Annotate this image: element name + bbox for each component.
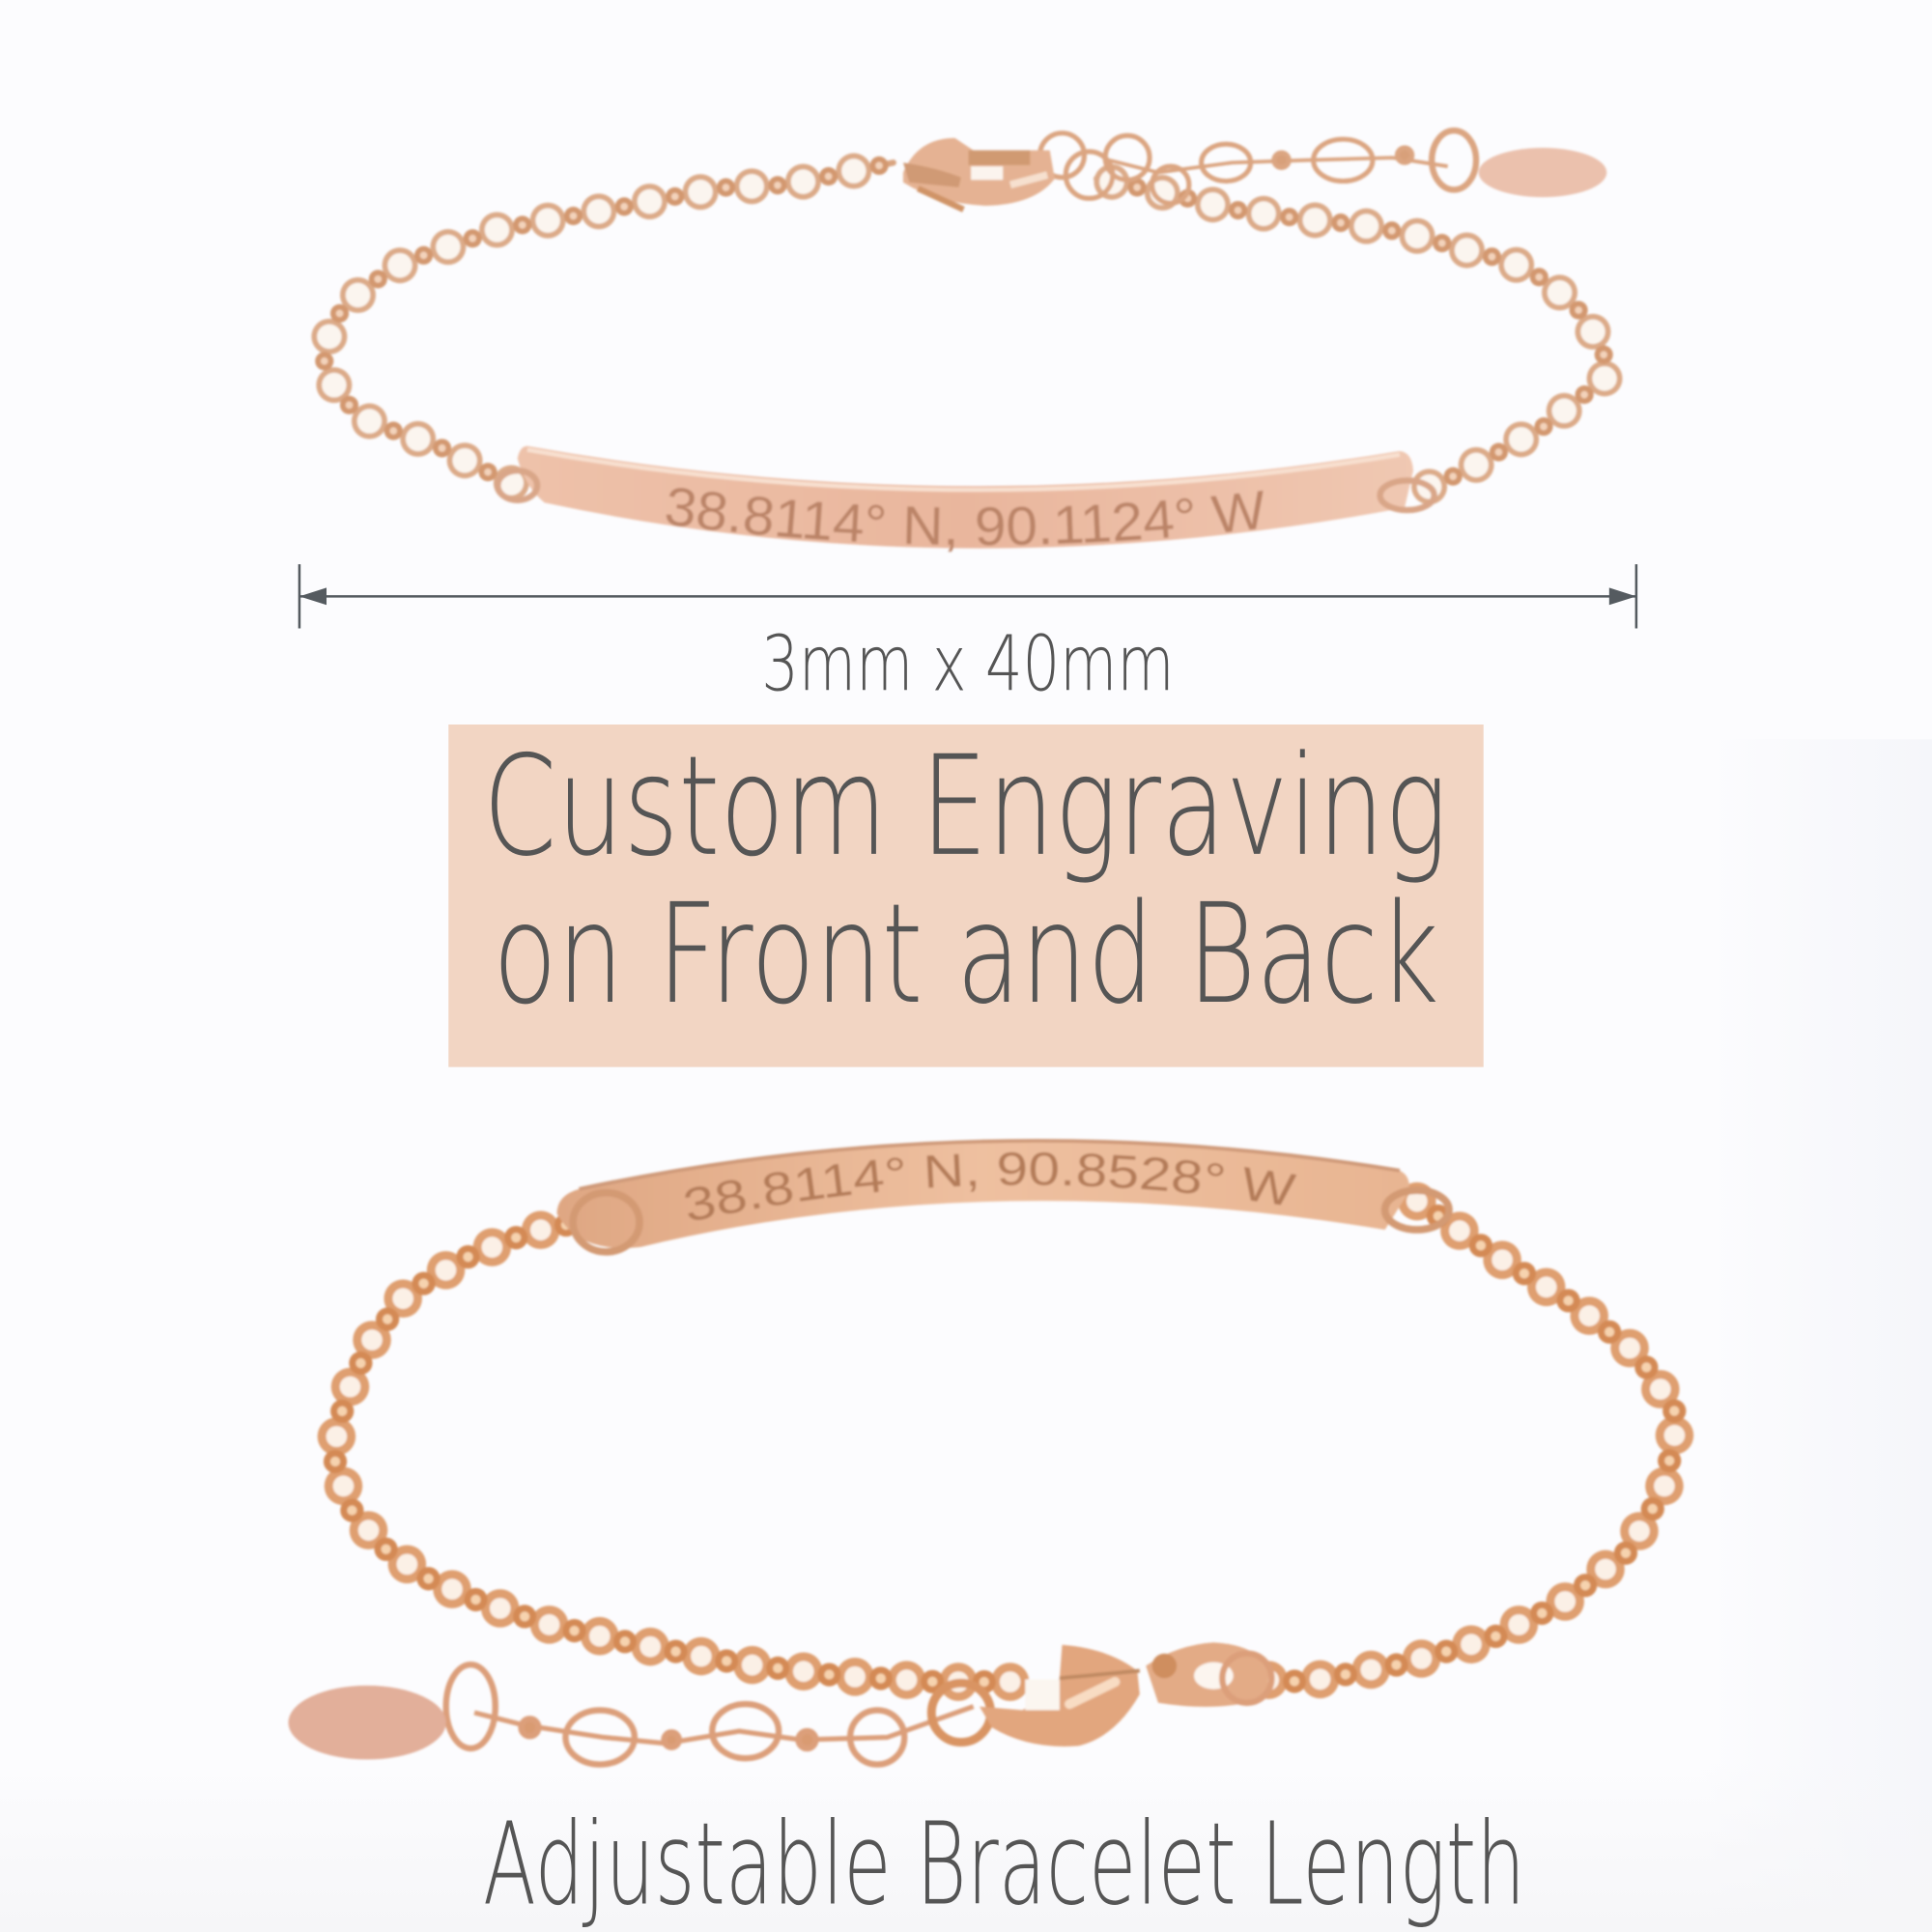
- bottom tag charm: [288, 1686, 446, 1759]
- top extender chain: [1040, 130, 1476, 203]
- top engraved bar: [497, 444, 1439, 554]
- top bar engraving: 38.8114° N, 90.1124° W: [666, 487, 1264, 554]
- bottom connector rings: [1146, 1642, 1271, 1707]
- dimension label: 3mm x 40mm: [761, 619, 1175, 708]
- bottom bracelet chain: [332, 1202, 1678, 1682]
- bottom engraved bar: [555, 1138, 1455, 1258]
- top lobster clasp: [903, 138, 1055, 210]
- top tag charm: [1479, 148, 1606, 197]
- bottom jump rings: [573, 1190, 1449, 1252]
- top bracelet chain: [323, 162, 1608, 487]
- top bracelet photo: [310, 126, 1624, 554]
- bottom bracelet photo: [287, 1138, 1695, 1770]
- bottom bar engraving: 38.8114° N, 90.8528° W: [684, 1151, 1296, 1221]
- dimension arrow: [299, 564, 1636, 629]
- heading line 1: Custom Engraving: [483, 725, 1448, 887]
- heading line 2: on Front and Back: [493, 873, 1439, 1035]
- bottom lobster clasp: [980, 1642, 1271, 1747]
- bottom extender chain: [446, 1664, 991, 1765]
- top jump rings: [497, 470, 1435, 510]
- heading panel: [448, 724, 1484, 1067]
